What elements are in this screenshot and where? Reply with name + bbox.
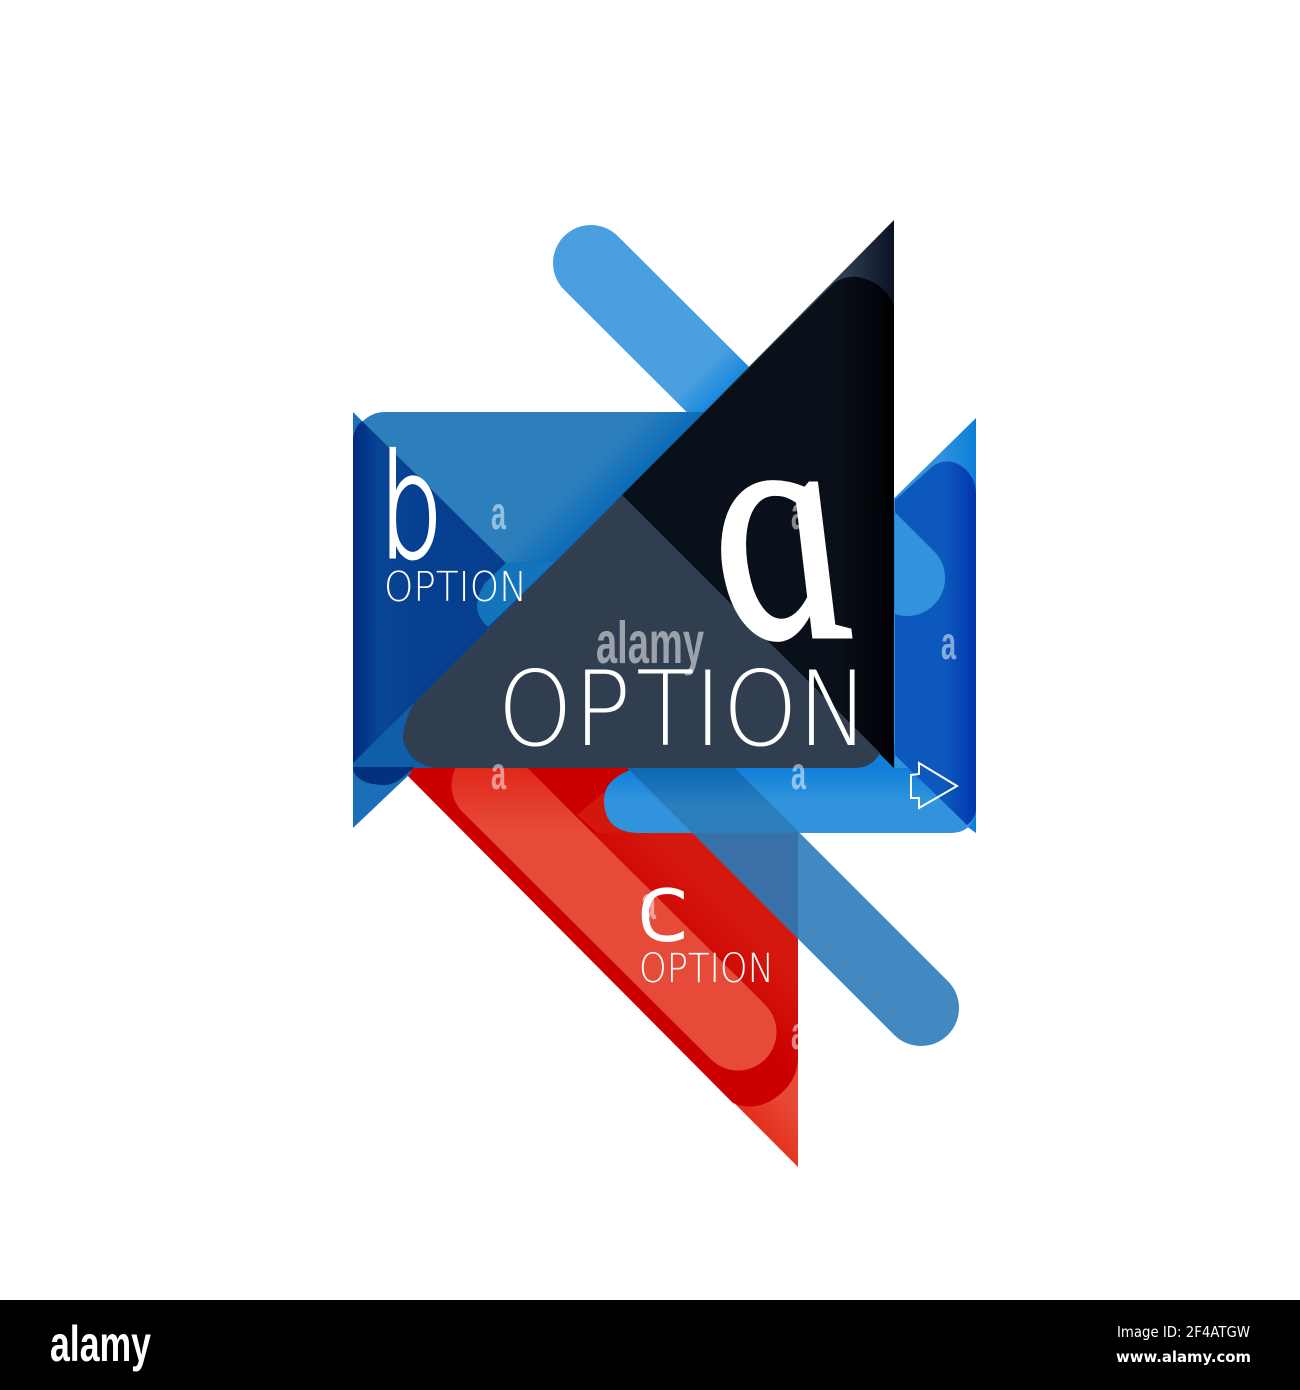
footer logo: alamy <box>50 1316 151 1372</box>
red rounded bar <box>490 785 738 1032</box>
upper light blue diagonal bar <box>591 263 907 578</box>
label: b: b <box>379 424 443 591</box>
footer url: www.alamy.com <box>1116 1348 1251 1366</box>
panel: right blue shape <box>604 418 976 833</box>
panel: a black triangle <box>622 220 894 768</box>
icon: outline arrow <box>911 763 957 808</box>
watermark: centre logo: alamy <box>596 610 704 676</box>
label: c OPTION: OPTION <box>639 946 774 992</box>
corner tip <box>353 412 365 436</box>
watermark: repeated letters: a <box>791 747 806 799</box>
light blue rounded band <box>604 745 976 833</box>
watermark: repeated letters: a <box>791 487 806 539</box>
panel: a slate triangle <box>403 495 880 768</box>
panel: b blue shape <box>353 412 780 828</box>
label: big OPTION: OPTION <box>498 651 869 770</box>
lower blue corner <box>353 697 440 768</box>
footer image id: Image ID: 2F4ATGW <box>1117 1323 1250 1341</box>
watermark: repeated letters: a <box>491 747 506 799</box>
rounded end behind option text <box>477 561 556 627</box>
lower blue diagonal bar <box>640 727 921 1008</box>
navy rounded corner <box>353 767 414 785</box>
watermark: repeated letters: a <box>641 877 656 929</box>
royal blue rounded shape <box>895 461 976 825</box>
watermark: repeated letters: a <box>791 1007 806 1059</box>
panel: c red triangle <box>400 768 798 1167</box>
watermark: repeated letters <box>491 487 956 1059</box>
watermark: repeated letters: a <box>941 617 956 669</box>
label: b OPTION: OPTION <box>384 563 527 611</box>
watermark: repeated letters: a <box>491 487 506 539</box>
dark blue triangle <box>353 421 556 764</box>
label: c: c <box>637 856 688 961</box>
label: big a: a <box>654 343 888 709</box>
footer bar <box>0 1300 1300 1390</box>
